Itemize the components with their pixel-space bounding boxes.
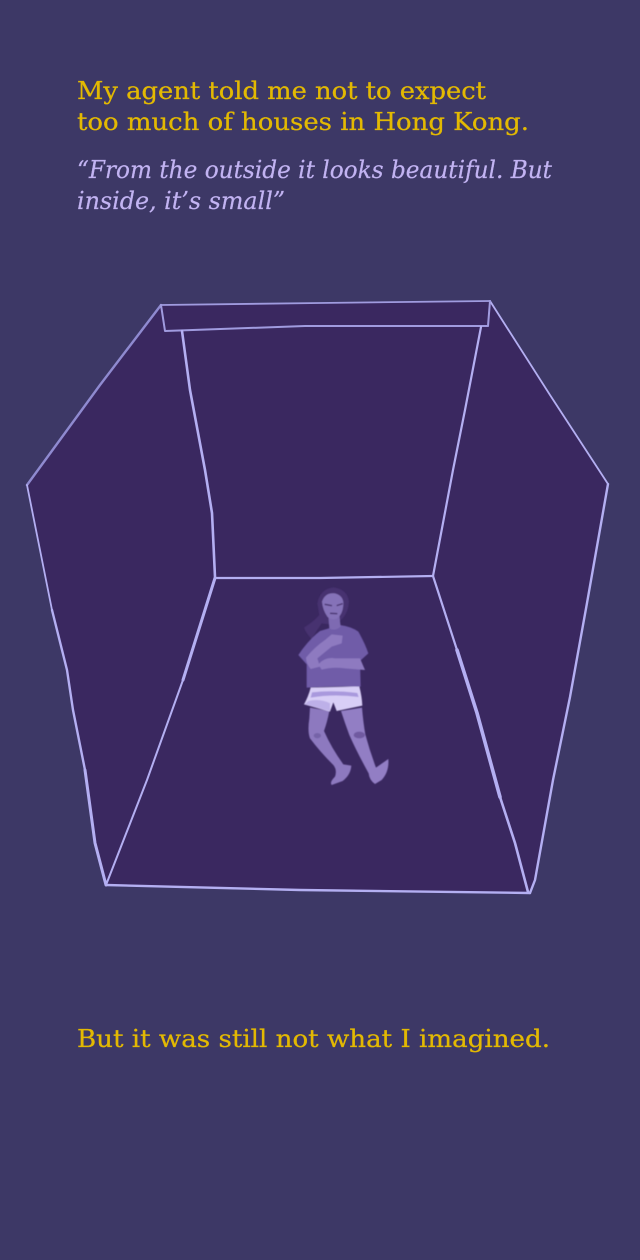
face	[322, 593, 343, 619]
neck	[328, 615, 341, 630]
quote text: “From the outside it looks beautiful. But	[77, 156, 552, 184]
quote text: inside, it’s small”	[77, 187, 285, 215]
left leg	[308, 708, 351, 785]
room fill	[27, 301, 608, 893]
illustration: empty room	[27, 301, 608, 893]
quote text	[77, 156, 552, 215]
arms	[306, 634, 343, 669]
facial features	[325, 604, 343, 614]
right leg	[341, 708, 388, 784]
knee shadows	[354, 732, 365, 738]
figure: woman lying on the floor	[298, 587, 388, 785]
heading: agent warning	[77, 77, 529, 136]
closing text: But it was still not what I imagined.	[77, 1025, 550, 1053]
hair	[304, 587, 349, 639]
heading: agent warning: My agent told me not to expect	[77, 77, 486, 105]
shirt	[298, 625, 368, 688]
room outline	[27, 301, 608, 893]
heading: agent warning: too much of houses in Hong Kong.	[77, 108, 529, 136]
shorts	[304, 686, 362, 712]
